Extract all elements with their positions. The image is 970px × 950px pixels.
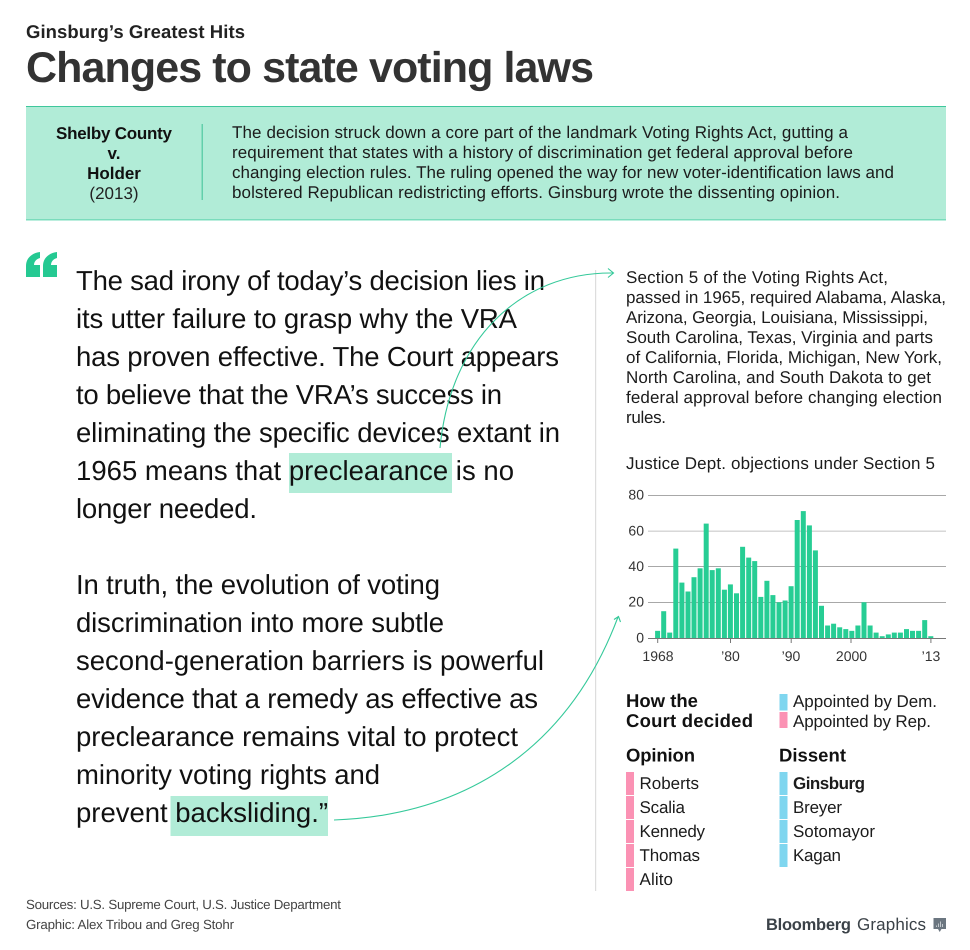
- Section 5 note: [626, 268, 946, 427]
- quote: second paragraph: preclearance remains vital to protect: [76, 721, 518, 752]
- source line: Graphic: Alex Tribou and Greg Stohr: [26, 917, 235, 932]
- quote: second paragraph: [76, 569, 544, 828]
- source line: [26, 897, 341, 932]
- opinion list: Scalia: [640, 798, 686, 817]
- y axis labels: [628, 486, 644, 646]
- quote: second paragraph: prevent backsliding.”: [76, 797, 328, 828]
- quote: first paragraph: its utter failure to grasp why the VRA: [76, 303, 518, 334]
- quote: first paragraph: eliminating the specific devices extant in: [76, 417, 560, 448]
- Section 5 note: South Carolina, Texas, Virginia and parts: [626, 328, 933, 347]
- case description: requirement that states with a history of discrimination get federal approval before: [232, 143, 853, 162]
- y axis labels: 40: [628, 558, 644, 574]
- y axis labels: 60: [628, 522, 644, 538]
- opinion list: [626, 744, 706, 891]
- x axis labels: ’13: [922, 648, 941, 664]
- chart title: Justice Dept. objections under Section 5: [626, 454, 935, 473]
- dissent list: Ginsburg: [793, 774, 865, 793]
- Section 5 note: Arizona, Georgia, Louisiana, Mississippi,: [626, 308, 928, 327]
- case name: Holder: [87, 164, 141, 183]
- panel: case summary: [26, 106, 946, 220]
- case description: [232, 123, 894, 202]
- Section 5 note: passed in 1965, required Alabama, Alaska,: [626, 288, 946, 307]
- x axis labels: [642, 648, 941, 664]
- x axis labels: ’80: [721, 648, 740, 664]
- highlight: preclearance: [289, 453, 452, 493]
- dissent list: Sotomayor: [793, 822, 875, 841]
- quote: second paragraph: second-generation barriers is powerful: [76, 645, 544, 676]
- case name: [56, 124, 173, 203]
- x axis labels: ’90: [782, 648, 801, 664]
- quote: first paragraph: to believe that the VRA’s success in: [76, 379, 502, 410]
- icon: chart bubble: [934, 918, 946, 932]
- highlight: backsliding: [170, 796, 328, 836]
- Section 5 note: Section 5 of the Voting Rights Act,: [626, 268, 888, 287]
- case name: (2013): [89, 184, 139, 203]
- legend: appointing party: Appointed by Rep.: [793, 712, 931, 731]
- case description: bolstered Republican redistricting efforts. Ginsburg wrote the dissenting opinion.: [232, 183, 840, 202]
- quote: first paragraph: 1965 means that preclearance is no: [76, 455, 514, 486]
- opinion list: Alito: [640, 870, 673, 889]
- opinion list: Thomas: [640, 846, 700, 865]
- opinion list: Roberts: [640, 774, 699, 793]
- quote: second paragraph: In truth, the evolution of voting: [76, 569, 440, 600]
- legend: appointing party: [780, 692, 937, 731]
- arrow: preclearance to Section 5 note: [440, 268, 614, 448]
- quote: second paragraph: evidence that a remedy as effective as: [76, 683, 538, 714]
- heading: how the court decided: Court decided: [626, 710, 753, 731]
- case name: v.: [108, 144, 120, 163]
- x axis labels: 1968: [642, 648, 674, 664]
- Section 5 note: rules.: [626, 408, 666, 427]
- case description: The decision struck down a core part of the landmark Voting Rights Act, gutting a: [232, 123, 849, 142]
- dissent list: Dissent: [779, 744, 846, 766]
- heading: how the court decided: [626, 690, 753, 731]
- quote: first paragraph: The sad irony of today’s decision lies in: [76, 265, 545, 296]
- dissent list: Kagan: [793, 846, 841, 865]
- source line: Sources: U.S. Supreme Court, U.S. Justice Department: [26, 897, 341, 912]
- quote: first paragraph: has proven effective. The Court appears: [76, 341, 559, 372]
- quote: first paragraph: [76, 265, 560, 524]
- y axis labels: 0: [636, 630, 644, 646]
- dissent list: Breyer: [793, 798, 842, 817]
- Bloomberg Graphics logo: Graphics: [857, 915, 926, 934]
- icon: quotation mark: [26, 252, 57, 277]
- quote: second paragraph: minority voting rights and: [76, 759, 380, 790]
- opinion list: Kennedy: [640, 822, 706, 841]
- y axis labels: 20: [628, 594, 644, 610]
- Section 5 note: federal approval before changing election: [626, 388, 942, 407]
- heading: how the court decided: How the: [626, 690, 698, 711]
- dissent list: [779, 744, 875, 867]
- bar chart: objections per year: [628, 486, 946, 664]
- case name: Shelby County: [56, 124, 173, 143]
- y axis labels: 80: [628, 486, 644, 502]
- Section 5 note: of California, Florida, Michigan, New York,: [626, 348, 942, 367]
- x axis labels: 2000: [836, 648, 867, 664]
- arrow: backsliding to chart: [334, 616, 620, 820]
- quote: first paragraph: longer needed.: [76, 493, 257, 524]
- column divider: [595, 270, 596, 891]
- title: Changes to state voting laws: [26, 44, 594, 92]
- kicker heading: Ginsburg’s Greatest Hits: [26, 21, 245, 42]
- Section 5 note: North Carolina, and South Dakota to get: [626, 368, 931, 387]
- legend: appointing party: Appointed by Dem.: [793, 692, 937, 711]
- Bloomberg Graphics logo: Bloomberg: [766, 916, 851, 934]
- bars: [655, 511, 933, 638]
- case description: changing election rules. The ruling opened the way for new voter-identification laws and: [232, 163, 894, 182]
- opinion list: Opinion: [626, 744, 695, 766]
- Bloomberg Graphics logo: [766, 915, 946, 934]
- quote: second paragraph: discrimination into more subtle: [76, 607, 444, 638]
